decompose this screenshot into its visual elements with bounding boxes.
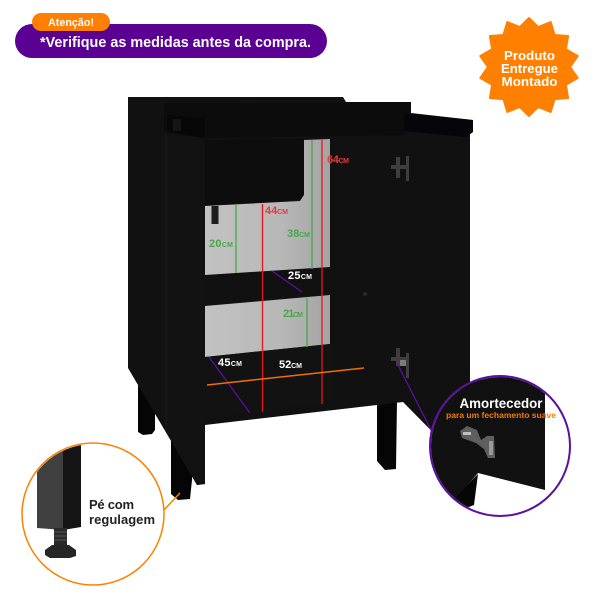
warning text: *Verifique as medidas antes da compra. (40, 34, 311, 51)
hinge: upper (391, 156, 409, 181)
sink basin (205, 139, 304, 205)
attention banner (15, 13, 327, 58)
cabinet (128, 97, 473, 500)
measure labels: 25CM (288, 270, 312, 282)
connector line (164, 493, 180, 510)
adjustable foot (37, 440, 81, 558)
measure labels: 52CM (279, 359, 302, 371)
attention tag: Atenção! (48, 17, 94, 29)
measure lines (207, 140, 364, 413)
left door edge (166, 133, 205, 485)
badge: produto entregue montado (480, 18, 578, 116)
measure labels: 44CM (265, 205, 288, 217)
connector line (397, 363, 432, 432)
lower interior opening (205, 295, 330, 357)
leg: front left (171, 430, 192, 500)
countertop (164, 102, 411, 138)
callout label: regulagem (89, 512, 155, 527)
badge: produto entregue montado: Montado (502, 74, 558, 89)
leg: right (377, 400, 397, 470)
callout title: Amortecedor (460, 395, 543, 411)
hinge: lower (391, 348, 409, 378)
callout label: Pé com (89, 497, 134, 512)
measure labels (209, 154, 349, 371)
badge: produto entregue montado: Produto (504, 48, 555, 63)
peg hole (363, 292, 367, 296)
measure labels: 45CM (218, 357, 242, 369)
callout subtitle: para um fechamento suave (446, 410, 556, 420)
callout: pé com regulagem (22, 440, 180, 585)
leg: back left (138, 385, 155, 435)
zoomed hinge (460, 426, 495, 458)
callout: amortecedor (397, 363, 570, 516)
measure labels: 20CM (209, 238, 233, 250)
floor shade (205, 344, 330, 418)
zoomed leg (455, 474, 478, 508)
badge: produto entregue montado: Entregue (501, 61, 558, 76)
measure labels: 64CM (327, 154, 349, 166)
upper interior opening (205, 139, 330, 275)
body (128, 97, 473, 485)
zoomed door (431, 381, 545, 499)
drain pipe (212, 206, 218, 224)
measure labels: 38CM (287, 228, 310, 240)
left side bracket (167, 115, 205, 138)
right door top shade (404, 113, 473, 137)
measure labels: 21CM (283, 308, 303, 320)
attention tag (32, 13, 110, 31)
